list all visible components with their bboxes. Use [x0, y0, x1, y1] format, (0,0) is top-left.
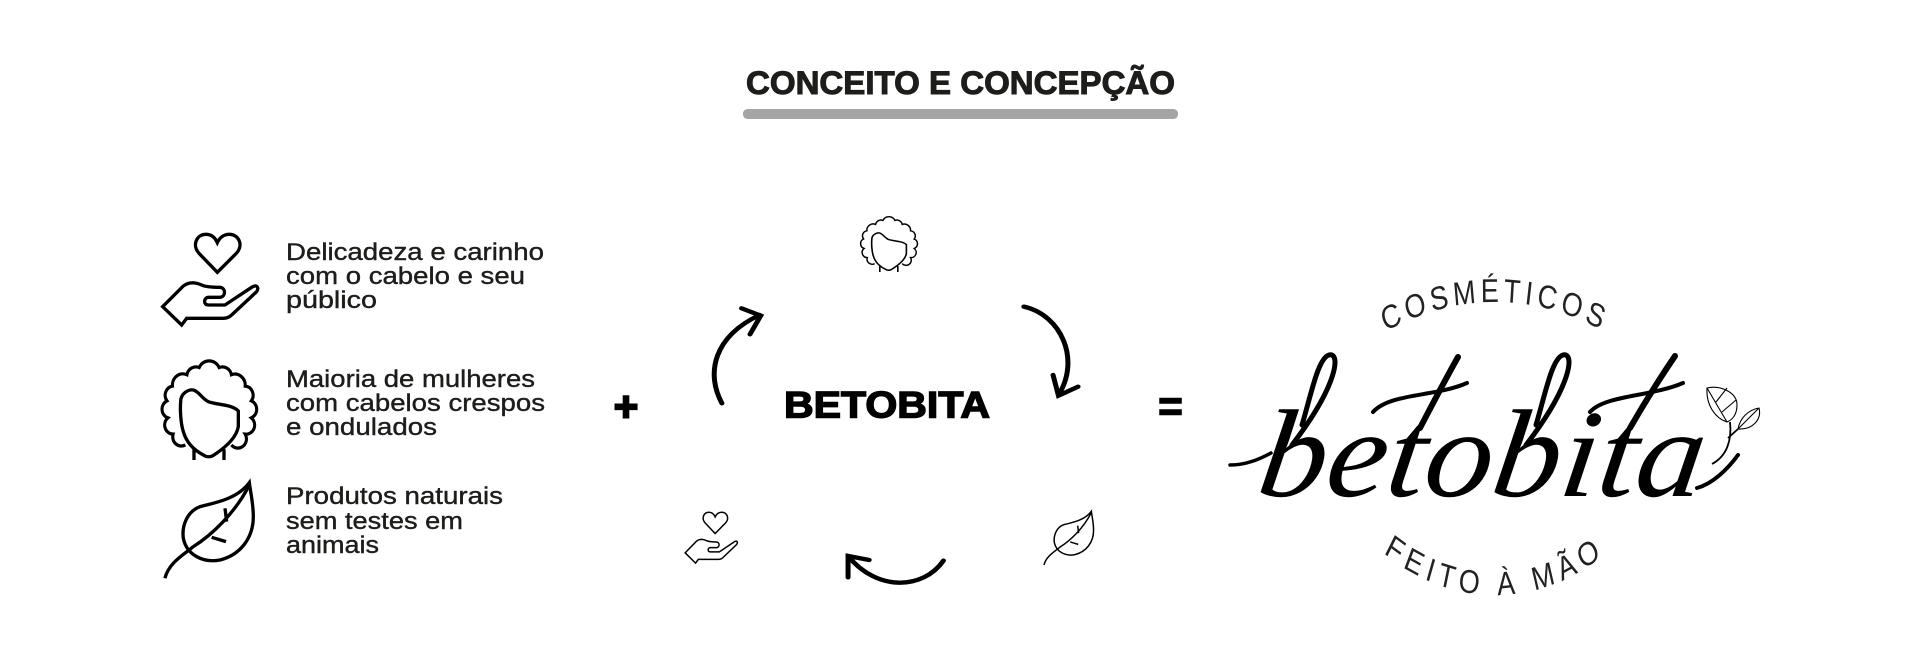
- text: maioria: Maioria de mulheres: [286, 366, 535, 393]
- icon: small leaf: [1044, 511, 1094, 565]
- plus sign: +: [614, 383, 638, 430]
- text: produtos: [286, 483, 503, 559]
- panel: cycle diagram: [685, 217, 1094, 583]
- panel: ingredient list: [162, 234, 545, 578]
- text: maioria: com cabelos crespos: [286, 390, 545, 417]
- text: produtos: animais: [286, 532, 379, 559]
- text: delicadeza: [286, 239, 544, 314]
- center label: BETOBITA: [784, 384, 990, 426]
- arrow: along the bottom: [848, 556, 943, 583]
- panel: betobita logo: [1228, 273, 1760, 596]
- text: maioria: e ondulados: [286, 414, 437, 441]
- arrow: up the left side: [714, 308, 761, 403]
- logo flourishes: [1230, 355, 1738, 488]
- equals sign: =: [1158, 382, 1183, 430]
- text: delicadeza: Delicadeza e carinho: [286, 239, 544, 266]
- logo text: feito à mão: FEITO À MÃO: [1385, 535, 1598, 596]
- logo text: cosméticos: COSMÉTICOS: [1382, 273, 1605, 328]
- title: CONCEITO E CONCEPÇÃO: [746, 65, 1175, 101]
- icon: leaf: [165, 483, 253, 578]
- text: maioria: [286, 366, 545, 441]
- text: produtos: Produtos naturais: [286, 483, 503, 510]
- text: delicadeza: com o cabelo e seu: [286, 263, 525, 290]
- icon: small heart over hand: [685, 512, 737, 563]
- icon: curly hair woman: [162, 361, 257, 460]
- logo wordmark: betobita: [1251, 386, 1716, 524]
- arrow: to the right side: [1024, 307, 1078, 396]
- icon: small curly hair woman: [861, 217, 917, 272]
- title underline: [743, 109, 1178, 119]
- text: produtos: sem testes em: [286, 508, 463, 535]
- text: delicadeza: público: [286, 287, 377, 314]
- icon: logo leaves: [1707, 387, 1760, 464]
- icon: heart over hand: [163, 234, 258, 325]
